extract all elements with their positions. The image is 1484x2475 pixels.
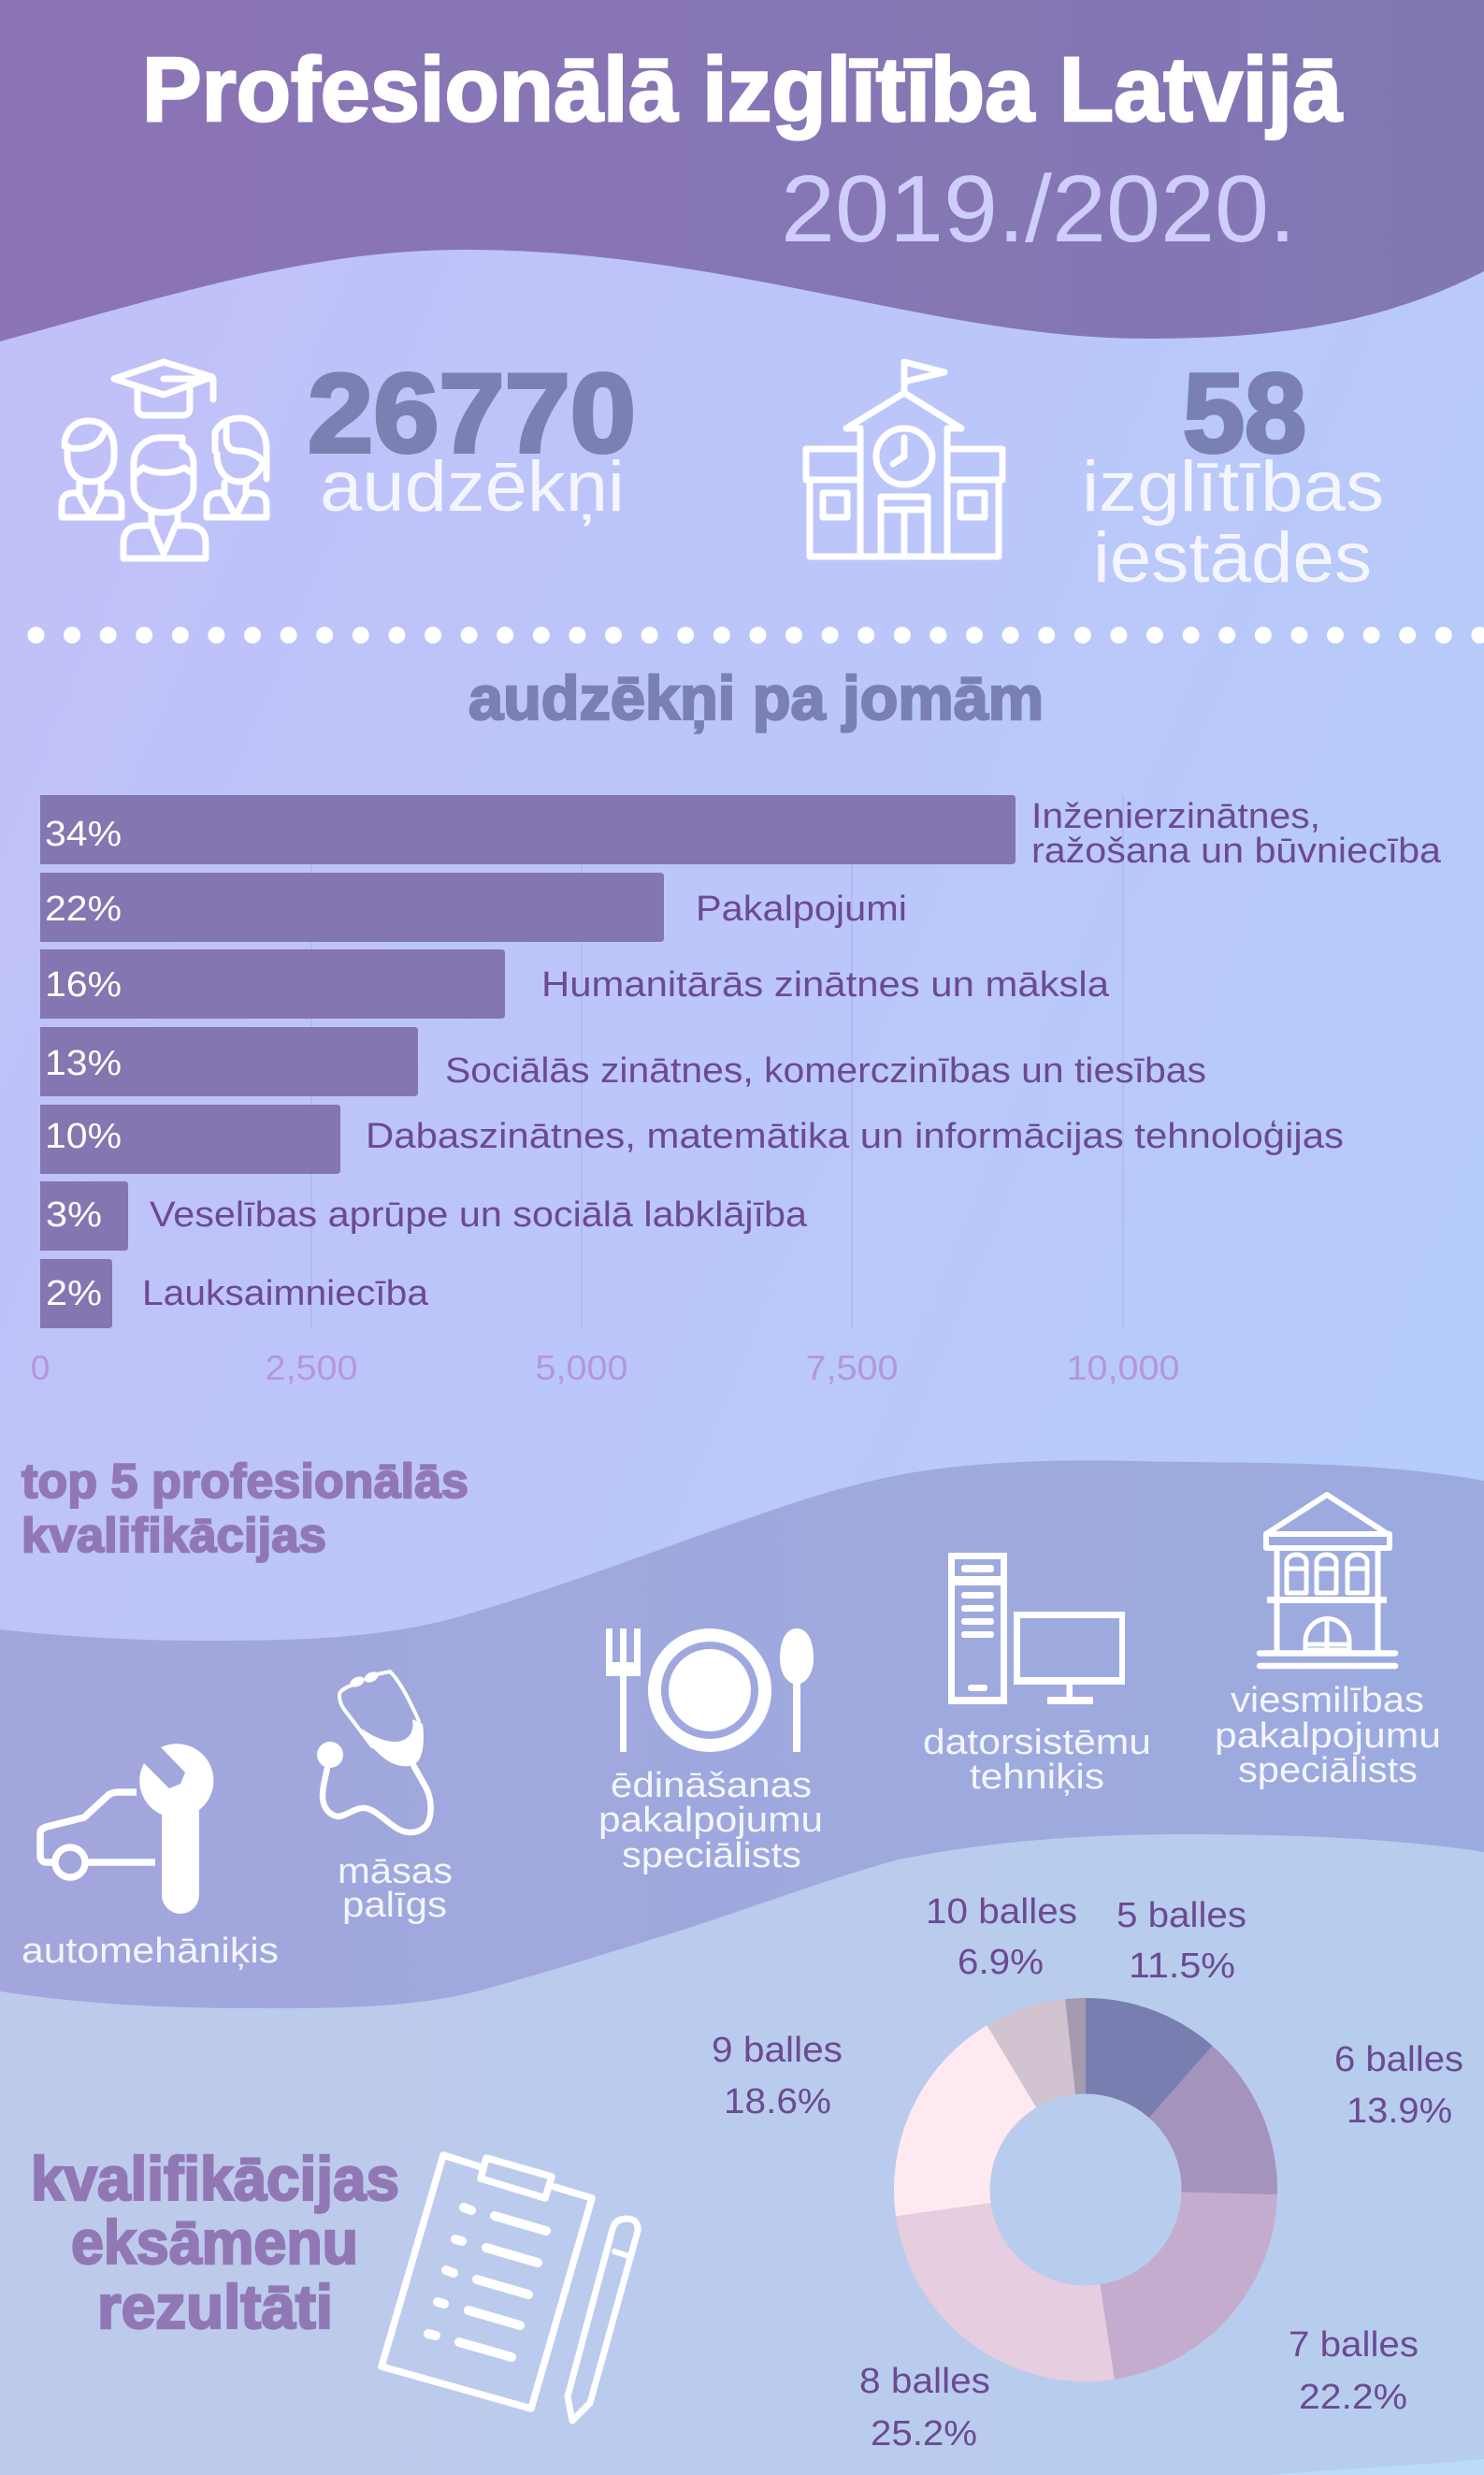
label: 10 balles: 6.9% — [958, 1943, 1044, 1982]
label: 8 balles: 8 balles — [859, 2362, 990, 2401]
label: catering specialist — [598, 1766, 823, 1875]
icon: stethoscope — [317, 1670, 431, 1832]
axis labels: 2,500 — [266, 1349, 357, 1387]
label: 7 balles — [1289, 2325, 1419, 2417]
icon: students — [62, 362, 267, 558]
axis labels: 10,000 — [1066, 1349, 1180, 1387]
heading: exam results — [31, 2144, 399, 2341]
label: hospitality specialist: speciālists — [1238, 1751, 1418, 1790]
bar: engineering: 34% — [45, 815, 122, 854]
heading: exam results: eksāmenu — [71, 2207, 358, 2277]
heading: top 5 qualifications — [22, 1455, 468, 1563]
panel: exam results section — [0, 1834, 1484, 2475]
bar: humanities: 16% — [45, 965, 122, 1005]
heading: top 5 qualifications: kvalifikācijas — [22, 1509, 326, 1563]
bar: services: 22% — [45, 890, 122, 929]
heading: top 5 qualifications: top 5 profesionālās — [22, 1455, 468, 1509]
bar: natural sciences: Dabaszinātnes, matemātika un informācijas tehnoloģijas — [366, 1117, 1344, 1156]
label: hospitality specialist: pakalpojumu — [1215, 1716, 1441, 1756]
axis labels: 5,000 — [535, 1349, 628, 1387]
bar: engineering — [40, 795, 1442, 871]
panel: qualifications band — [0, 1460, 1484, 2475]
bar: agriculture: Lauksaimniecība — [142, 1274, 429, 1313]
bar: social sciences: Sociālās zinātnes, komerczinības un tiesības — [445, 1051, 1206, 1091]
label: 8 balles: 25.2% — [871, 2414, 977, 2453]
bar: health — [40, 1181, 808, 1251]
stat: schools label — [1082, 447, 1384, 598]
bar: health: 3% — [46, 1195, 102, 1235]
bar: engineering: ražošana un būvniecība — [1031, 832, 1442, 871]
bar: engineering: Inženierzinātnes, — [1031, 797, 1320, 836]
label: 7 balles: 7 balles — [1289, 2325, 1419, 2365]
label: 7 balles: 22.2% — [1299, 2378, 1407, 2417]
label: catering specialist: ēdināšanas — [611, 1766, 812, 1805]
label: hospitality specialist — [1215, 1681, 1441, 1790]
label: hospitality specialist: viesmilības — [1231, 1681, 1424, 1720]
bar chart: students by field — [31, 795, 1442, 1387]
bar: natural sciences — [40, 1105, 1344, 1174]
donut chart: exam results — [894, 1998, 1277, 2381]
heading: students by field: audzēkņi pa jomām — [468, 663, 1044, 733]
stat: schools label: iestādes — [1093, 518, 1372, 598]
axis labels: 7,500 — [806, 1349, 898, 1387]
label: catering specialist: speciālists — [622, 1836, 801, 1875]
label: computer technician: datorsistēmu — [923, 1723, 1151, 1762]
bar: social sciences — [40, 1027, 1206, 1096]
icon: computer — [948, 1553, 1125, 1704]
axis labels: 0 — [31, 1349, 50, 1387]
label: 6 balles — [1334, 2040, 1463, 2131]
label: 6 balles: 13.9% — [1347, 2091, 1452, 2131]
stat: schools number: 58 — [1183, 351, 1306, 476]
label: 10 balles — [926, 1892, 1077, 1982]
label: 9 balles — [712, 2031, 843, 2121]
bar: social sciences: 13% — [45, 1044, 122, 1083]
decorative corner — [1268, 2459, 1484, 2475]
label: 5 balles: 5 balles — [1117, 1896, 1246, 1935]
label: nurse assistant: māsas — [338, 1852, 453, 1891]
donut labels — [712, 1892, 1463, 2453]
axis labels — [31, 1349, 1180, 1387]
label: 8 balles — [859, 2362, 990, 2453]
stat: schools label: izglītības — [1082, 447, 1384, 527]
title: Profesionālā izglītība Latvijā — [142, 38, 1343, 140]
subtitle: year: 2019./2020. — [781, 157, 1296, 262]
label: 5 balles: 11.5% — [1129, 1947, 1235, 1986]
bar: natural sciences: 10% — [45, 1117, 122, 1156]
label: nurse assistant: palīgs — [342, 1886, 447, 1925]
icon: clipboard and pencil — [382, 2155, 638, 2421]
stat: students label: audzēkņi — [320, 447, 625, 527]
heading: exam results: kvalifikācijas — [31, 2144, 399, 2213]
label: nurse assistant — [338, 1852, 453, 1925]
bar: agriculture: 2% — [46, 1274, 102, 1313]
bar: agriculture — [40, 1259, 429, 1328]
bar: services: Pakalpojumi — [696, 890, 907, 929]
dotted divider — [28, 627, 1484, 644]
label: 10 balles: 10 balles — [926, 1892, 1077, 1932]
bar: services — [40, 873, 907, 942]
icon: hotel building — [1260, 1495, 1395, 1666]
label: catering specialist: pakalpojumu — [598, 1801, 823, 1840]
label: 9 balles: 9 balles — [712, 2031, 843, 2070]
bar: health: Veselības aprūpe un sociālā labklājība — [150, 1195, 808, 1235]
stat: students number: 26770 — [308, 351, 636, 476]
label: computer technician — [923, 1723, 1151, 1797]
label: 9 balles: 18.6% — [724, 2082, 831, 2121]
bar: humanities — [40, 949, 1110, 1019]
icon: school — [806, 362, 1002, 557]
panel: header wave — [0, 0, 1484, 341]
label: 6 balles: 6 balles — [1334, 2040, 1463, 2079]
icon: plate and cutlery — [606, 1628, 814, 1752]
label: computer technician: tehniķis — [970, 1758, 1104, 1797]
label: automechanic: automehāniķis — [22, 1932, 279, 1971]
heading: exam results: rezultāti — [97, 2272, 333, 2341]
label: 5 balles — [1117, 1896, 1246, 1986]
bar: humanities: Humanitārās zinātnes un māksla — [541, 965, 1110, 1005]
icon: car and wrench — [40, 1744, 213, 1914]
